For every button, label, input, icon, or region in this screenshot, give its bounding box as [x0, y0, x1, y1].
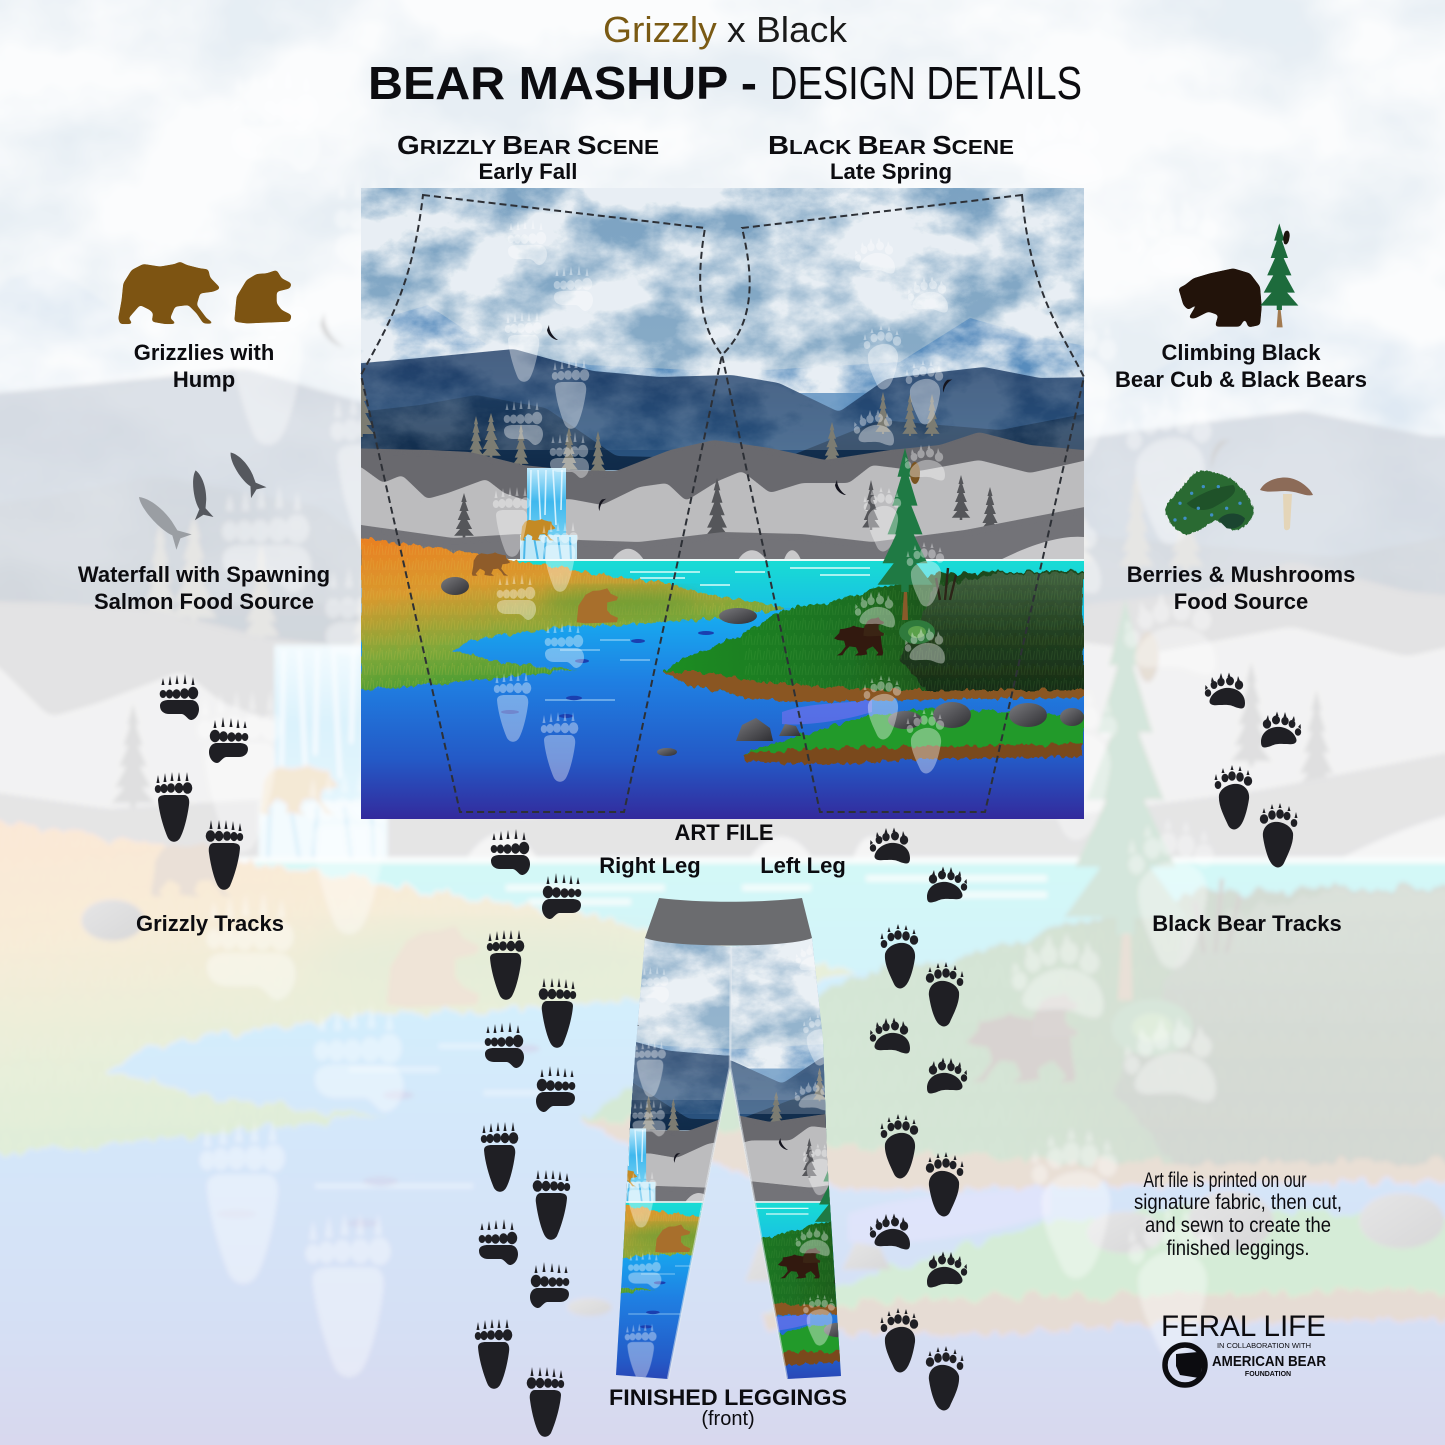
logo: feral life and american bear foundation: FERAL LIFE	[1161, 1310, 1326, 1343]
title	[368, 9, 1082, 109]
waistband	[645, 898, 812, 946]
label: grizzlies with hump: Hump	[173, 367, 235, 392]
label: black bear tracks: Black Bear Tracks	[1152, 911, 1342, 936]
scene illustration	[340, 188, 1105, 819]
icon: mushroom	[1260, 478, 1313, 530]
label: finished leggings: (front)	[701, 1408, 755, 1430]
title: Grizzly x Black	[603, 9, 848, 50]
logo: feral life and american bear foundation: IN COLLABORATION WITH	[1217, 1341, 1311, 1350]
icon: berry bush	[1165, 471, 1253, 535]
label: grizzlies with hump: Grizzlies with	[134, 340, 274, 365]
icon: grizzly tracks left	[155, 674, 248, 890]
scene heading: black bear: BLACK BEAR SCENE	[768, 130, 1014, 160]
logo: feral life and american bear foundation	[1161, 1310, 1326, 1385]
text block: art file note: Art file is printed on our	[1144, 1169, 1307, 1192]
text block: art file note	[1134, 1169, 1342, 1260]
label: art file	[599, 820, 846, 878]
scene bears	[472, 519, 884, 656]
waterfall	[520, 468, 577, 561]
logo: feral life and american bear foundation: AMERICAN BEAR	[1212, 1353, 1326, 1370]
label: waterfall: Salmon Food Source	[94, 589, 314, 614]
scene heading: grizzly: Early Fall	[478, 159, 578, 184]
icon: black bear and tree with cub	[1178, 223, 1298, 327]
left autumn meadow	[361, 538, 786, 690]
scene heading: black bear: Late Spring	[830, 159, 952, 184]
art file panel	[340, 188, 1105, 819]
berry bush in scene	[899, 620, 935, 644]
scene heading: grizzly: GRIZZLY BEAR SCENE	[397, 130, 659, 160]
scene fish and birds	[501, 325, 956, 718]
label: grizzly tracks: Grizzly Tracks	[136, 911, 284, 936]
icon: black bear tracks right	[1205, 672, 1301, 867]
gray trees on pale ridge	[454, 475, 999, 540]
lower right island	[744, 702, 1084, 765]
center grizzly track column	[475, 829, 581, 1437]
scene heading: black bear	[768, 130, 1014, 184]
distant trees	[348, 377, 940, 473]
icon: grizzly bears	[118, 262, 292, 324]
scene heading: grizzly	[397, 130, 659, 184]
icon: salmon	[131, 447, 267, 550]
finished leggings	[484, 898, 841, 1379]
center black bear track column	[870, 828, 967, 1410]
right green bank	[663, 570, 1084, 702]
label: finished leggings: FINISHED LEGGINGS	[609, 1385, 847, 1410]
cattails	[936, 568, 956, 600]
label: waterfall: Waterfall with Spawning	[78, 562, 330, 587]
label: finished leggings	[609, 1385, 847, 1430]
text block: art file note: and sewn to create the	[1145, 1214, 1331, 1237]
title: DESIGN DETAILS	[770, 57, 1082, 109]
translucent footprints	[493, 219, 948, 782]
label: berries and mushrooms: Food Source	[1174, 589, 1308, 614]
river water	[361, 608, 1084, 819]
label: art file: Left Leg	[760, 853, 846, 878]
title: BEAR MASHUP -	[368, 57, 757, 109]
label: art file: ART FILE	[674, 820, 774, 845]
label: climbing black bear: Climbing Black	[1162, 340, 1320, 365]
label: art file: Right Leg	[599, 853, 701, 878]
dashed cut lines	[361, 195, 1084, 812]
rocks	[441, 577, 801, 756]
scene tree with climbing cub	[878, 448, 932, 620]
text block: art file note: signature fabric, then cut,	[1134, 1191, 1342, 1214]
text block: art file note: finished leggings.	[1166, 1237, 1310, 1260]
label: berries and mushrooms: Berries & Mushrooms	[1127, 562, 1355, 587]
logo: feral life and american bear foundation: FOUNDATION	[1245, 1371, 1291, 1378]
label: climbing black bear: Bear Cub & Black Bears	[1115, 367, 1367, 392]
